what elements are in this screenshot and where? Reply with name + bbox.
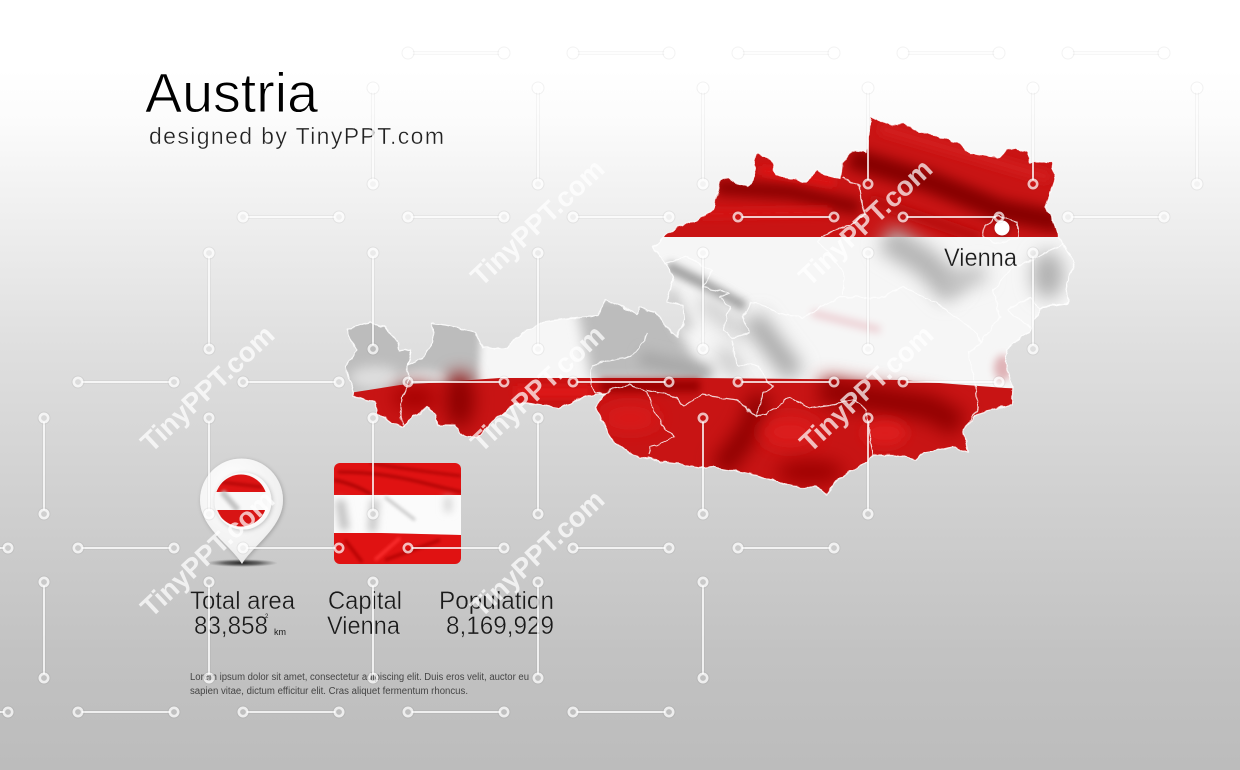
white middle band (330, 237, 1090, 397)
watermarks: TinyPPT.com (464, 484, 610, 623)
stat: capital: Vienna (327, 612, 400, 640)
title: Austria (145, 61, 319, 124)
bottom red band (330, 372, 1030, 510)
map outer rim (345, 117, 1075, 495)
description text: sapien vitae, dictum efficitur elit. Cras aliquet fermentum rhoncus. (190, 686, 468, 697)
map region borders (400, 178, 1068, 455)
stat: total area: km (274, 627, 286, 637)
icon: Vienna location dot (994, 220, 1010, 236)
icon: Austrian flag (334, 463, 462, 564)
watermarks: TinyPPT.com (793, 319, 939, 458)
stat: total area: 2 (265, 614, 269, 620)
icon: map pin with round flag (200, 458, 283, 567)
watermarks: TinyPPT.com (134, 319, 280, 458)
subtitle: designed by TinyPPT.com (149, 123, 444, 149)
stat: population: 8,169,929 (446, 612, 554, 640)
watermarks: TinyPPT.com (134, 484, 280, 623)
stat: total area: Total area (190, 587, 295, 615)
map: Austria with flag fill (345, 117, 1074, 496)
stat: population: Population (439, 587, 554, 615)
stat: total area (190, 587, 295, 640)
description text: Lorem ipsum dolor sit amet, consectetur adipiscing elit. Duis eros velit, auctor eu (190, 672, 529, 683)
watermarks: TinyPPT.com (464, 153, 610, 292)
watermarks: TinyPPT.com (792, 153, 938, 292)
top red band (663, 117, 1058, 237)
stat: capital (327, 587, 402, 640)
stat: total area: 83,858 (194, 612, 268, 640)
watermarks (134, 153, 939, 623)
watermarks: TinyPPT.com (464, 319, 610, 458)
stat: capital: Capital (328, 587, 402, 615)
description text (190, 672, 529, 697)
label: Vienna: Vienna (944, 244, 1017, 272)
stat: population (439, 587, 554, 640)
